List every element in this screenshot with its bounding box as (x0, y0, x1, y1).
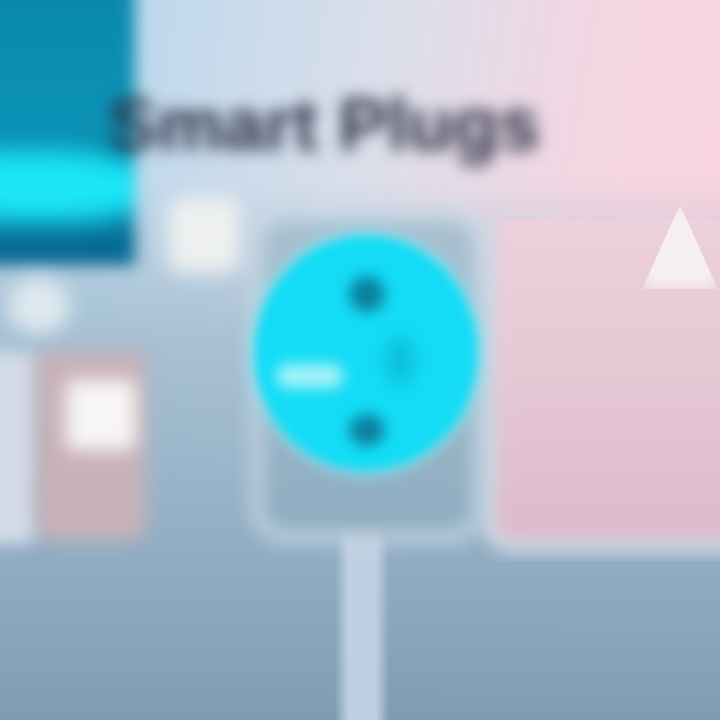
socket hole bottom (349, 414, 385, 446)
panel: left pink card (36, 350, 146, 540)
cable (335, 520, 389, 720)
plug socket circle (255, 236, 477, 470)
icon: white square (66, 380, 136, 450)
icon: white triangle (642, 205, 718, 289)
panel: left pale card (0, 352, 38, 544)
panel: pink card (496, 170, 720, 538)
plug body (252, 210, 484, 542)
background lower shading (0, 180, 720, 720)
socket centre shade (385, 336, 415, 386)
white blob icon (8, 278, 70, 334)
panel: teal screen with wave (0, 0, 135, 265)
cyan wave band (0, 150, 160, 222)
icon: small white tile (168, 197, 240, 273)
title: Smart Plugs (108, 83, 540, 166)
socket light mark (277, 364, 343, 388)
socket hole top (349, 276, 385, 312)
